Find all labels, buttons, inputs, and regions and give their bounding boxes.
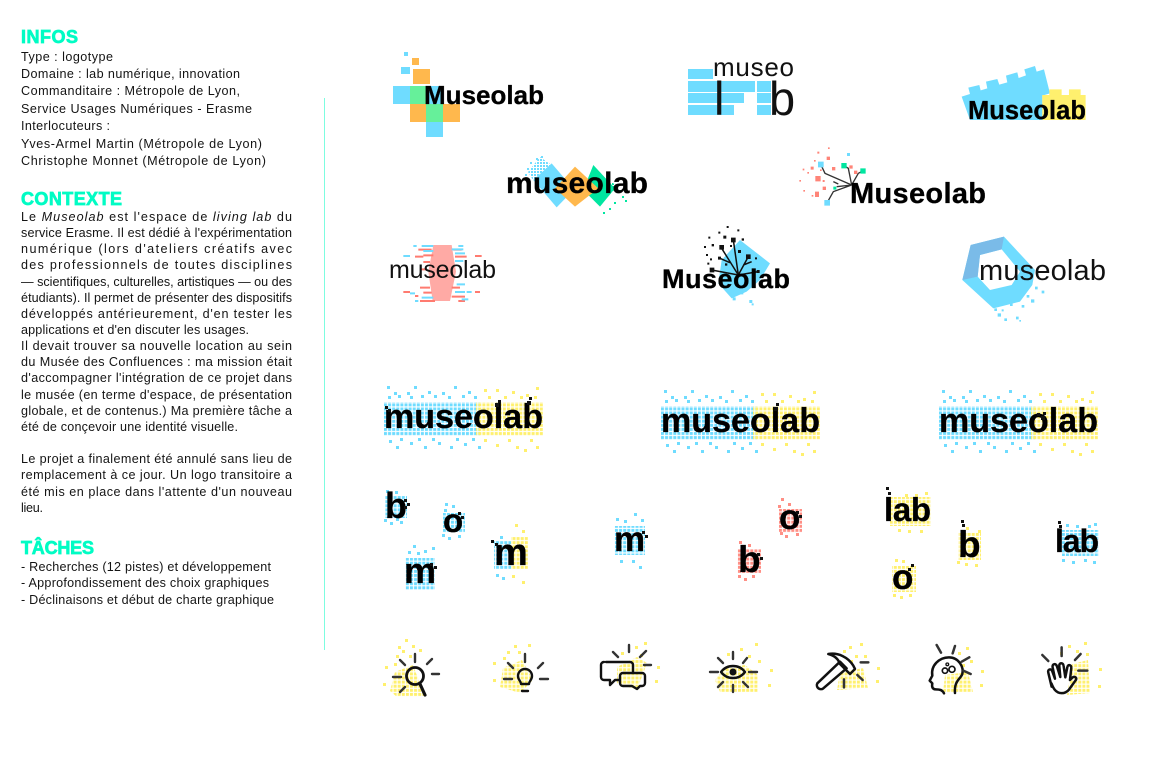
icon row	[383, 639, 1102, 697]
heading: infos: INFOS	[21, 27, 78, 47]
text block: project details: Interlocuteurs :	[21, 119, 110, 133]
logo: dotted museolab version 1: museolab	[384, 398, 543, 436]
text block: context description: Le Museolab est l'espace de living lab du	[21, 210, 292, 224]
text block: context description: Le projet a finalement été annulé sans lieu de	[21, 452, 292, 466]
logo: pixel squares Museolab: Museolab	[424, 80, 544, 110]
logo: tree and blue band Museolab	[662, 226, 790, 305]
letter m, blue: m	[404, 550, 436, 591]
text block: context description: lieu.	[21, 501, 43, 515]
text block: task list: - Approfondissement des choix graphiques	[21, 576, 269, 590]
text block: context description: globale, et de contenus.) Ma première tâche a	[21, 404, 292, 418]
icon: light bulb	[493, 644, 548, 693]
text block: project details: Christophe Monnet (Métropole de Lyon)	[21, 154, 266, 168]
text block: context description: — scientifiques, culturelles, artistiques — ou des	[21, 275, 292, 289]
logo: diamonds museolab	[506, 156, 648, 214]
word lab, blue: lab	[1055, 523, 1099, 559]
text block: project details: Type : logotype	[21, 50, 113, 64]
text block: context description: service Erasme. Il est dédié à l'expérimentation	[21, 226, 292, 240]
heading: contexte: CONTEXTE	[21, 189, 122, 209]
letter o, blue: o	[443, 502, 463, 539]
logo: dotted museolab version 2: museolab	[661, 402, 820, 440]
icon: eye	[710, 643, 773, 692]
text block: context description: étudiants). Il permet de présenter des dispositifs	[21, 291, 292, 305]
text block: project details: Service Usages Numériques - Erasme	[21, 102, 252, 116]
logo: tree Museolab: Museolab	[850, 178, 986, 210]
logo: blue bars museo lab: l	[714, 72, 724, 125]
panel: project information sidebar	[21, 27, 292, 607]
logo: hexagon museolab	[962, 237, 1106, 322]
text block: task list: - Recherches (12 pistes) et développement	[21, 560, 272, 574]
logo: tree and blue band Museolab: Museolab	[662, 264, 790, 294]
text block: context description: été de conçevoir une identité visuelle.	[21, 420, 238, 434]
letter o, red: o	[779, 498, 800, 537]
text block: context description: d'accompagner l'intégration de ce projet dans	[21, 371, 292, 385]
letter m, blue and yellow: m	[494, 532, 528, 574]
icon: speech bubbles	[601, 642, 660, 690]
icon: raised hand	[1042, 642, 1102, 695]
logo: diamonds museolab: museolab	[506, 167, 648, 200]
text block: project details: Yves-Armel Martin (Métropole de Lyon)	[21, 137, 262, 151]
letter b, red: b	[738, 539, 761, 580]
text block: context description: numérique (lors d'ateliers créatifs avec	[21, 242, 292, 256]
letter o, yellow: o	[892, 558, 913, 597]
text block: context description: applications et d'en discuter les usages.	[21, 323, 249, 337]
icon: head with gears	[930, 645, 984, 693]
logo: lego brick Museolab: Museolab	[968, 97, 1086, 125]
logo: blue bars museo lab: b	[769, 72, 795, 125]
logo: blue bars museo lab	[688, 52, 795, 125]
logo variants: single letters and lab	[384, 485, 1099, 599]
logo: dotted museolab version 3: museolab	[939, 402, 1098, 440]
icon: magnifier	[383, 639, 439, 697]
letter m, blue	[614, 513, 648, 569]
letter b, blue: b	[385, 485, 407, 526]
text block: project details	[21, 50, 266, 168]
text block: context description: été mis en place dans l'attente d'un nouveau	[21, 485, 292, 499]
letter m, blue: m	[614, 520, 645, 559]
text block: context description: du Musée des Confluences : ma mission était	[21, 355, 292, 369]
heading: tâches: TÂCHES	[21, 537, 94, 558]
word lab, yellow: lab	[884, 491, 931, 528]
text block: context description: des professionnels de toutes disciplines	[21, 258, 292, 272]
text block: project details: Commanditaire : Métropole de Lyon,	[21, 84, 240, 98]
text block: context description: le musée (en terme d'espace, de présentation	[21, 388, 292, 402]
logo: dotted museolab version 1	[384, 386, 543, 452]
logo: pixel squares Museolab	[393, 52, 544, 137]
text block: project details: Domaine : lab numérique, innovation	[21, 67, 240, 81]
logo: lego brick Museolab	[962, 66, 1086, 125]
logo: dotted museolab version 3	[939, 390, 1098, 456]
logo: dotted museolab version 2	[661, 390, 820, 456]
vertical divider	[324, 98, 325, 650]
text block: task list: - Déclinaisons et début de charte graphique	[21, 593, 274, 607]
text block: context description: Il devait trouver sa nouvelle location au sein	[21, 339, 292, 353]
text block: context description	[21, 210, 292, 515]
logo: blue bars museo lab: museo	[713, 52, 794, 82]
logo: salmon museolab: museolab	[389, 256, 496, 284]
text block: task list	[21, 560, 274, 607]
logo: salmon museolab	[389, 245, 496, 302]
logo: hexagon museolab: museolab	[979, 255, 1106, 287]
letter m, blue and yellow	[491, 524, 528, 584]
logo: tree Museolab	[799, 147, 986, 210]
icon: hammer	[817, 643, 880, 690]
text block: context description: développés antérieurement, d'en tester les	[21, 307, 292, 321]
letter b, yellow: b	[958, 524, 981, 565]
text block: context description: remplacement à ce jour. Un logo transitoire a	[21, 468, 292, 482]
